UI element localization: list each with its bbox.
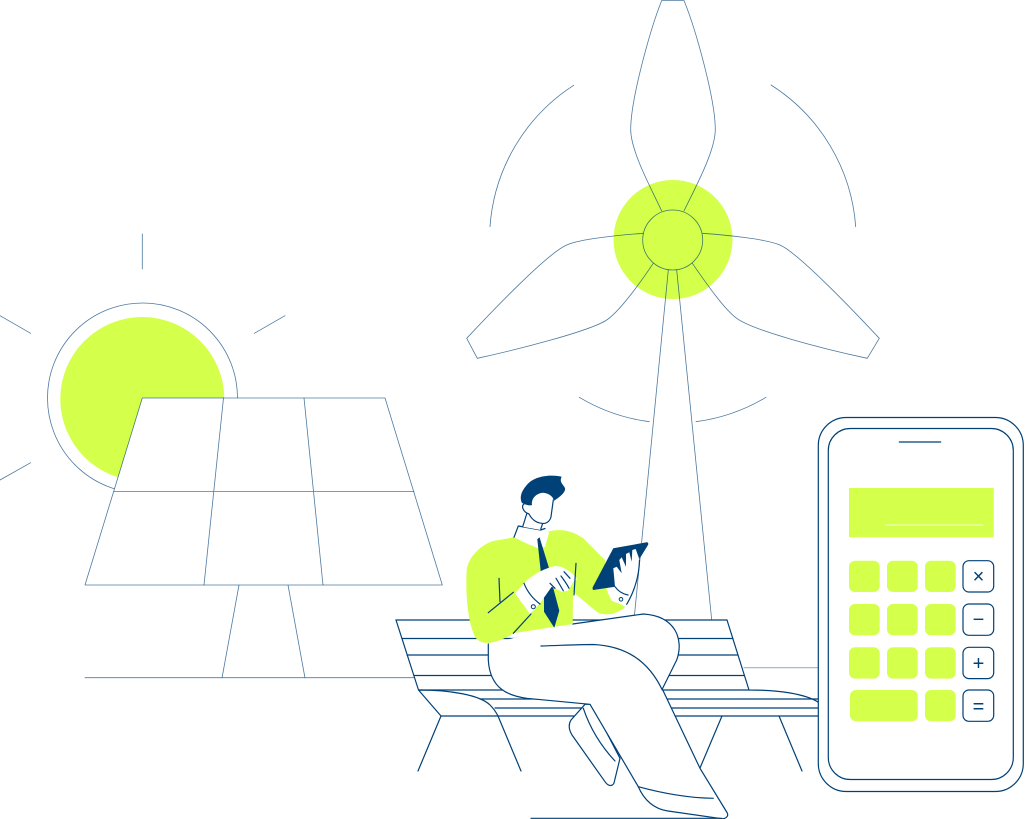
speaker: [899, 441, 941, 443]
tablet: [593, 542, 648, 590]
icon: sun with rays: [0, 234, 285, 493]
turbine hub glow: [614, 180, 732, 299]
operator keys: ×: [973, 566, 984, 588]
back foot: [569, 704, 620, 786]
operator keys: −: [973, 609, 984, 631]
solar panel on stand: [85, 398, 442, 678]
motion arcs: [490, 85, 856, 422]
tie: [537, 537, 559, 628]
turbine blades: [467, 0, 879, 358]
calculator phone: [818, 418, 1023, 792]
number keys: [849, 561, 956, 721]
ground line: [531, 817, 722, 819]
right hand and cuff: [607, 549, 639, 605]
collar: [514, 526, 549, 548]
phone body: [818, 418, 1023, 792]
shirt fold lines: [488, 563, 576, 633]
left hand and cuff: [515, 566, 577, 614]
phone screen: [828, 428, 1013, 780]
bench: [396, 620, 818, 771]
operator keys: +: [973, 653, 984, 675]
neck and face: [523, 513, 543, 530]
hair: [521, 476, 565, 505]
wind turbine: [467, 0, 879, 620]
calculator display: [849, 488, 994, 537]
operator keys: [963, 561, 994, 721]
turbine tower: [634, 270, 712, 620]
turbine hub: [643, 210, 703, 270]
operator keys: =: [973, 696, 984, 718]
shirt: [466, 530, 625, 643]
person sitting on bench with tablet: [466, 476, 728, 819]
trousers: [488, 614, 728, 819]
